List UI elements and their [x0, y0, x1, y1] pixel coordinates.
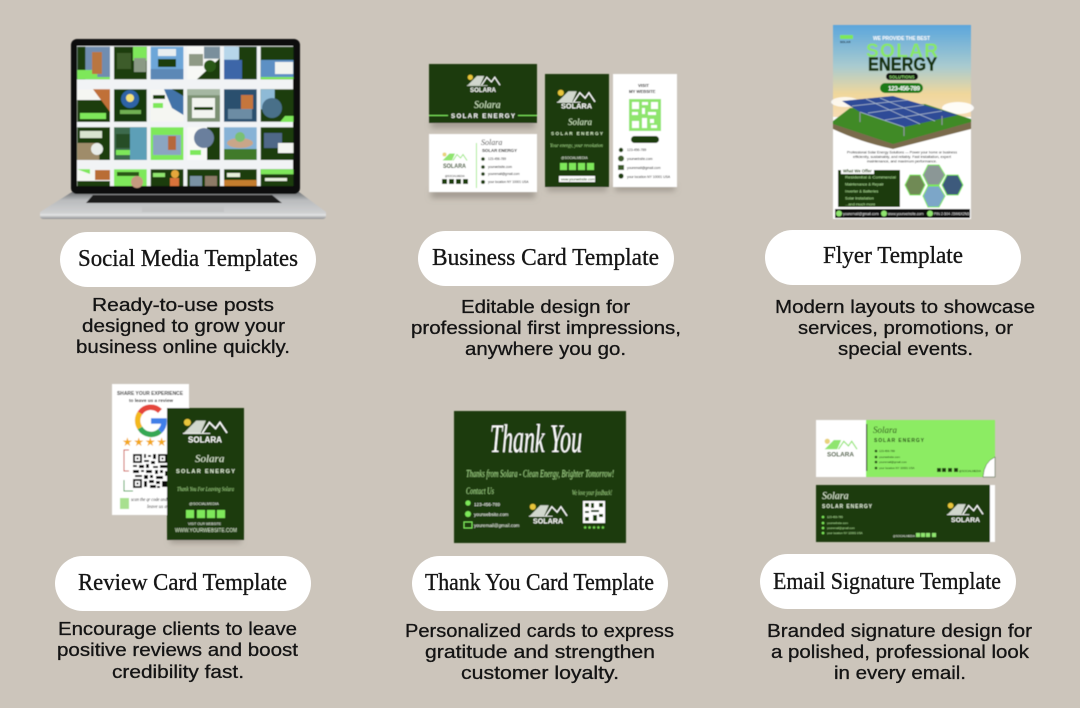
- card front portrait: Your energy, your revolution: [550, 144, 603, 149]
- flyer mockup: Solar Installation: [845, 196, 874, 200]
- review card mockups: [112, 384, 244, 543]
- dark signature: SOLARA: [951, 517, 980, 524]
- description: email signature template: Branded signature design for: [767, 620, 1032, 641]
- description: social media templates: Ready-to-use posts: [92, 294, 274, 315]
- flyer mockup: SOLAR: [866, 41, 938, 62]
- pill heading: review card template: [55, 556, 311, 611]
- card back landscape: [429, 134, 537, 192]
- panel: email signature template: [760, 420, 1032, 683]
- description: business card template: [411, 296, 681, 359]
- description: email signature template: in every email.: [834, 662, 966, 683]
- card front portrait: Solara: [568, 117, 593, 127]
- email signature mockups: [816, 420, 995, 542]
- card back landscape: SOLARA: [443, 164, 467, 170]
- QR code: [132, 453, 168, 489]
- description: review card template: credibility fast.: [112, 661, 244, 682]
- dark thank you card: SOLARA: [188, 436, 222, 444]
- pill heading: email signature template: Email Signature Template: [773, 569, 1001, 595]
- thank you card mockup: 123-456-789: [474, 502, 500, 507]
- pill heading: business card template: [418, 231, 674, 286]
- pill heading: flyer template: Flyer Template: [823, 243, 963, 269]
- flyer mockup: ENERGY: [868, 54, 937, 74]
- card back portrait: MY WEBSITE: [629, 89, 656, 94]
- light signature: youremail@gmail.com: [879, 460, 907, 464]
- white review card: scan the qr code and: [131, 498, 167, 503]
- dark thank you card: WWW.YOURWEBSITE.COM: [175, 528, 237, 534]
- dark thank you card: VISIT OUR WEBSITE: [188, 522, 222, 526]
- flyer mockup: SOLUTIONS: [889, 74, 915, 80]
- description: business card template: professional first impressions,: [411, 317, 681, 338]
- card front portrait: [545, 74, 609, 187]
- dark thank you card: Thank You For Leaving Solara: [177, 487, 234, 493]
- solar panels on grass: [833, 96, 971, 149]
- card front landscape: SOLARA: [470, 87, 496, 94]
- description: business card template: anywhere you go.: [465, 338, 626, 359]
- dark signature: Solara: [822, 491, 849, 502]
- dark signature: yourwebsite.com: [827, 521, 849, 525]
- flyer mockup: maintenance, and maximum performance.: [867, 160, 937, 164]
- panel: thank you card template: [405, 411, 674, 683]
- social post thumbnails: [77, 47, 293, 188]
- description: review card template: Encourage clients to leave: [58, 618, 297, 639]
- dark thank you card: @SOCIALMEDIA: [189, 502, 219, 506]
- description: flyer template: [775, 296, 1035, 359]
- dark signature: @SOCIALMEDIA: [893, 534, 915, 538]
- light signature: your location NY 10001 USA: [879, 466, 915, 470]
- icon: google G: [138, 407, 164, 434]
- rating stars: ★★★★: [122, 435, 167, 449]
- flyer mockup: Maintenance & Repair: [845, 182, 884, 186]
- QR code: [583, 501, 605, 523]
- light signature: SOLAR ENERGY: [874, 438, 925, 444]
- panel: business card template: [411, 64, 681, 359]
- thank you card mockup: [454, 411, 626, 543]
- pill heading: social media templates: [60, 232, 316, 287]
- description: email signature template: a polished, professional look: [771, 641, 1030, 662]
- business card mockups: [429, 64, 677, 198]
- pill heading: thank you card template: [412, 556, 668, 611]
- card front portrait: @SOCIALMEDIA: [561, 156, 588, 160]
- dark thank you card: Solara: [195, 453, 225, 465]
- flyer mockup: Residential & Commercial: [845, 174, 896, 180]
- thank you card mockup: yourwebsite.com: [474, 512, 509, 517]
- dark signature: youremail@gmail.com: [827, 526, 855, 530]
- card front portrait: www.yourwebsite.com: [561, 178, 595, 182]
- flyer mockup: efficiently, sustainably, and reliably. Fast installation, expert: [853, 155, 951, 159]
- flyer mockup: 123-456-789: [888, 86, 920, 92]
- light signature: [816, 420, 995, 477]
- flyer mockup: PIN 2-504 J5W6X2N5: [934, 212, 969, 216]
- thank you card mockup: We love your feedback!: [572, 489, 612, 497]
- pill heading: social media templates: Social Media Templates: [78, 246, 298, 272]
- light signature: 123-456-789: [879, 449, 895, 453]
- card back landscape: yourwebsite.com: [488, 165, 512, 169]
- description: thank you card template: Personalized cards to express: [405, 620, 674, 641]
- card back landscape: @SOCIALMEDIA: [445, 175, 465, 178]
- card front portrait: SOLARA: [561, 104, 592, 110]
- description: social media templates: [76, 294, 290, 357]
- pill heading: flyer template: [765, 230, 1021, 285]
- card back portrait: your location NY 10001 USA: [627, 175, 671, 179]
- light signature: @SOCIALMEDIA: [959, 469, 981, 473]
- white review card: leave us a: [147, 505, 167, 510]
- dark signature: your location NY 10001 USA: [827, 531, 863, 535]
- flyer mockup: youremail@gmail.com: [843, 212, 879, 216]
- description: social media templates: business online quickly.: [76, 336, 290, 357]
- panel: review card template: [55, 384, 311, 682]
- description: flyer template: special events.: [838, 338, 973, 359]
- description: review card template: [57, 618, 298, 682]
- card back portrait: yourwebsite.com: [627, 157, 653, 161]
- thank you card mockup: ★★★★★: [583, 525, 605, 531]
- light signature: SOLARA: [827, 452, 855, 458]
- flyer mockup: ...and much more: [845, 202, 875, 206]
- card back landscape: Solara: [481, 138, 502, 147]
- description: thank you card template: customer loyalty.: [461, 662, 619, 683]
- card front landscape: [429, 64, 537, 123]
- card front landscape: Solara: [474, 100, 501, 111]
- description: flyer template: Modern layouts to showcase: [775, 296, 1035, 317]
- thank you card mockup: Thank You: [490, 416, 582, 461]
- pill heading: email signature template: [760, 554, 1016, 609]
- dark signature: 123-456-789: [827, 515, 843, 519]
- flyer mockup: Inverter & Batteries: [845, 188, 878, 194]
- card back portrait: [613, 74, 677, 187]
- description: social media templates: designed to grow your: [82, 315, 285, 336]
- thank you card mockup: Thanks from Solara - Clean Energy, Brighter Tomorrow!: [466, 468, 614, 480]
- dark thank you card: SOLAR ENERGY: [176, 469, 235, 475]
- description: flyer template: services, promotions, or: [798, 317, 1013, 338]
- description: email signature template: [767, 620, 1032, 683]
- description: business card template: Editable design for: [461, 296, 630, 317]
- flyer mockup: WE PROVIDE THE BEST: [873, 36, 930, 42]
- solara logo: [529, 504, 567, 526]
- card back portrait: VISIT: [638, 83, 649, 88]
- dark signature: SOLAR ENERGY: [822, 504, 873, 510]
- description: thank you card template: gratitude and strengthen: [425, 641, 655, 662]
- pill heading: review card template: Review Card Template: [78, 570, 287, 596]
- description: thank you card template: [405, 620, 674, 683]
- thank you card mockup: Contact Us: [466, 486, 494, 496]
- dark signature: [816, 485, 995, 542]
- pill heading: thank you card template: Thank You Card Template: [425, 570, 654, 596]
- white review card: [112, 384, 189, 515]
- white review card: to leave us a review: [129, 398, 173, 403]
- panel: social media templates: [40, 39, 326, 357]
- flyer mockup: What We Offer: [843, 168, 872, 174]
- thank you card mockup: youremail@gmail.com: [474, 523, 520, 528]
- laptop mockup: [40, 39, 326, 219]
- pill heading: business card template: Business Card Template: [432, 245, 659, 271]
- card back landscape: SOLAR ENERGY: [482, 148, 517, 153]
- solara logo: SOLARA: [533, 518, 563, 526]
- flyer mockup: www.yourwebsite.com: [888, 212, 924, 216]
- dark thank you card: [167, 408, 244, 543]
- light signature: Solara: [873, 425, 898, 435]
- flyer mockup: Professional Solar Energy Solutions — Power your home or business: [847, 150, 957, 154]
- flyer mockup: [831, 25, 974, 219]
- card front portrait: SOLAR ENERGY: [551, 131, 603, 136]
- card back landscape: your location NY 10001 USA: [488, 180, 529, 184]
- card back landscape: youremail@gmail.com: [488, 172, 520, 176]
- description: review card template: positive reviews and boost: [57, 639, 298, 660]
- card back portrait: youremail@gmail.com: [627, 166, 661, 170]
- light signature: yourwebsite.com: [879, 455, 901, 459]
- flyer mockup: SOLAR: [840, 40, 851, 44]
- card back portrait: 123-456-789: [627, 148, 646, 152]
- card back landscape: 123-456-789: [488, 157, 506, 161]
- card front landscape: SOLAR ENERGY: [451, 113, 516, 120]
- panel: flyer template: [765, 25, 1035, 359]
- white review card: SHARE YOUR EXPERIENCE: [117, 391, 184, 397]
